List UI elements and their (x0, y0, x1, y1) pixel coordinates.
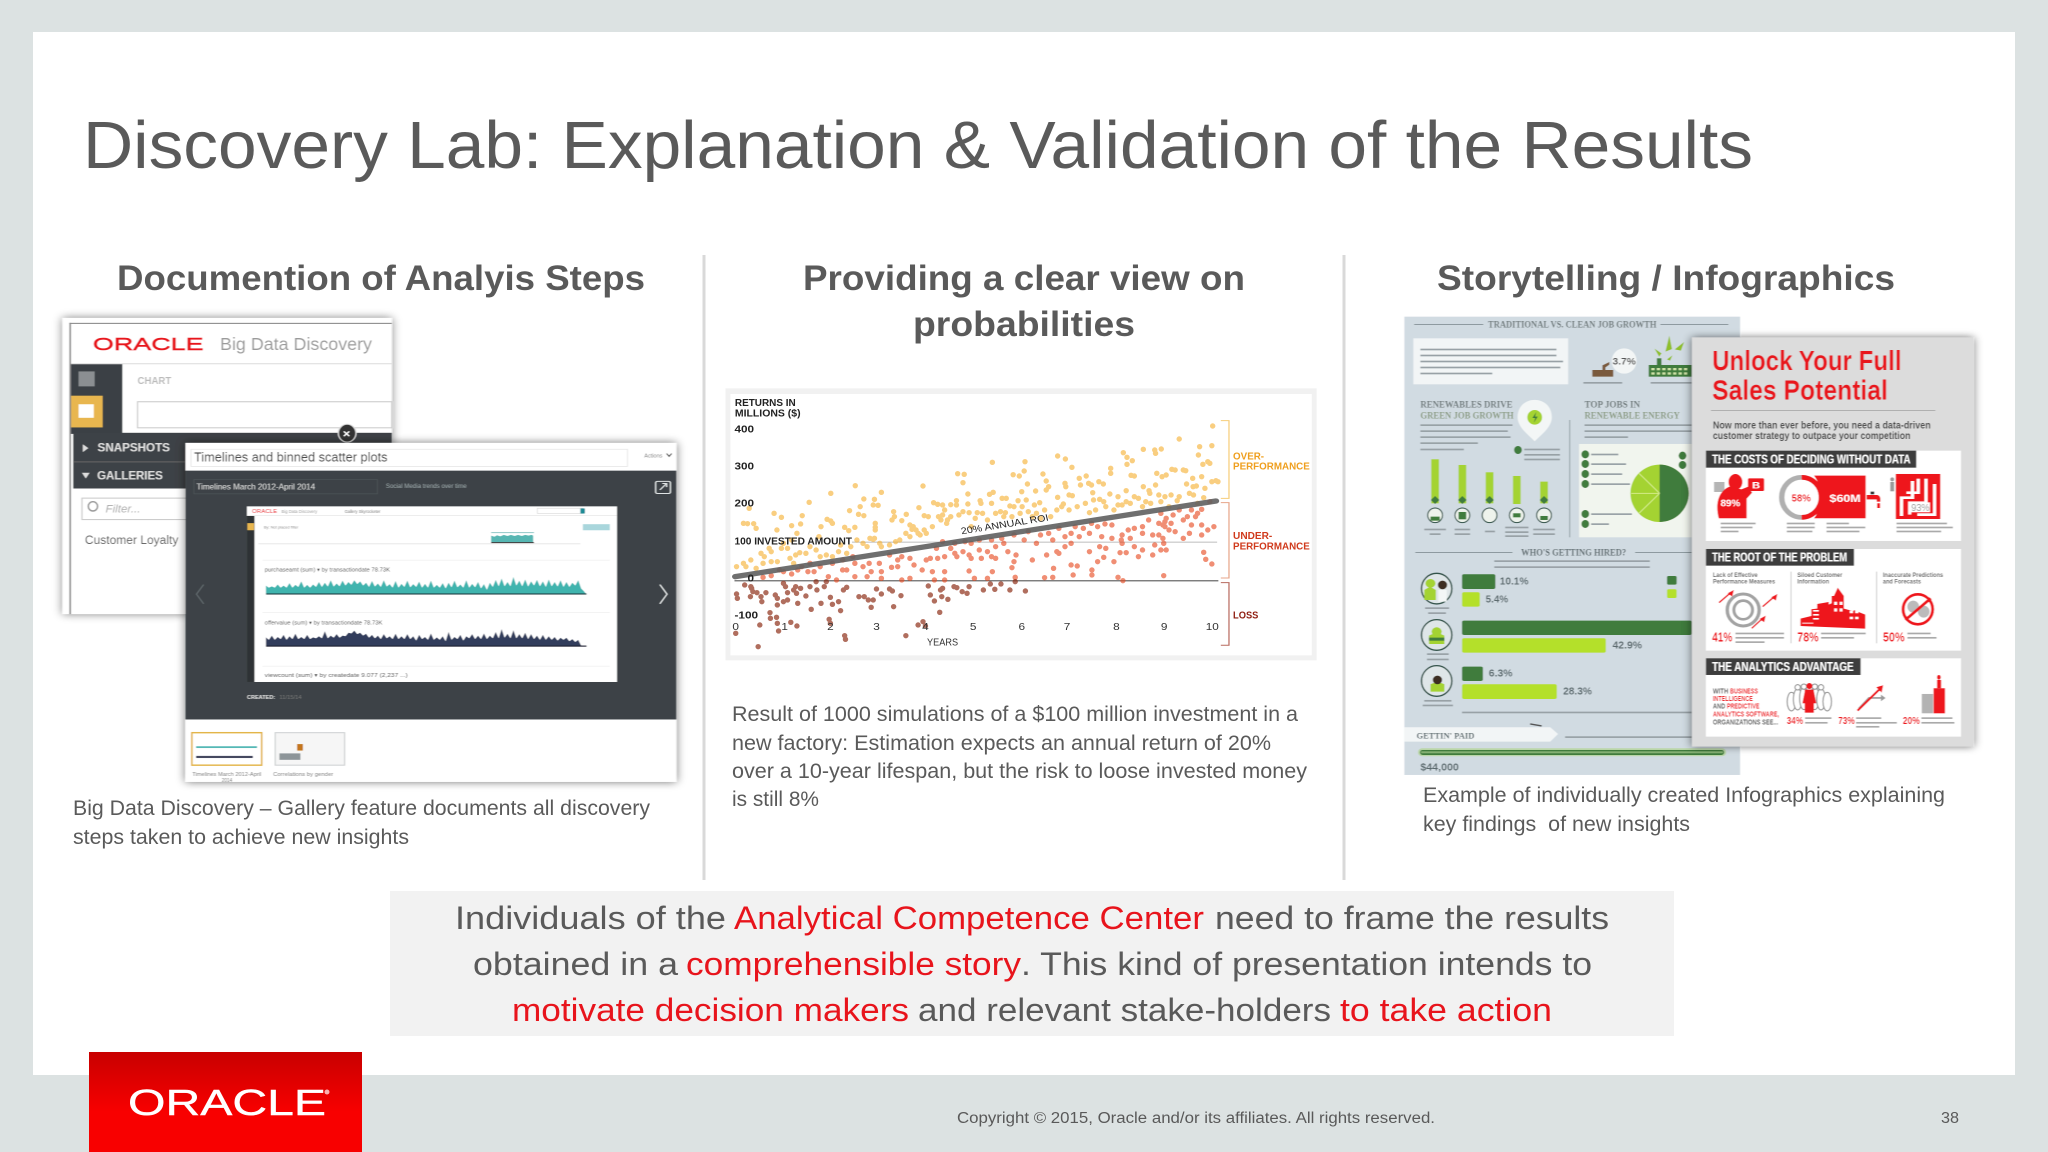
screenshot: front gallery window: 11/15/14 (279, 695, 302, 701)
section: analytics advantage (1706, 658, 1961, 737)
screenshot: back window: GALLERIES (97, 469, 163, 482)
heading: probabilities: probabilities (913, 304, 1135, 344)
screenshot: back window (63, 318, 392, 614)
y axis labels (734, 398, 852, 621)
dots: over-performance (737, 426, 1218, 568)
caption: infographics (1423, 783, 1945, 836)
section: analytics advantage: THE ANALYTICS ADVANTAGE (1712, 660, 1854, 674)
section: costs of deciding without data: B (1752, 481, 1760, 491)
section: analytics advantage: 73% (1838, 716, 1855, 727)
screenshot: back window: CHART (138, 376, 172, 387)
bracket: over-performance (1221, 421, 1310, 498)
footer: copyright: Copyright © 2015, Oracle and/or its affiliates. All rights reserved. (957, 1110, 1435, 1127)
dots: loss (736, 582, 1025, 647)
infographic: clean job growth: 42.9% (1613, 640, 1642, 651)
x axis labels: YEARS (927, 637, 958, 648)
screenshot: front gallery window: Timelines March 2012-April 2014 (196, 482, 315, 491)
dots: under-performance (763, 502, 1214, 581)
section: analytics advantage: ANALYTICS SOFTWARE, (1713, 710, 1779, 718)
bracket: under-performance: PERFORMANCE (1233, 541, 1310, 552)
infographic: unlock your full sales potential: Unlock Your Full (1712, 346, 1902, 376)
logo: Oracle (89, 1052, 362, 1152)
screenshot: front gallery window: Timelines and binned scatter plots (194, 450, 388, 464)
screenshot: inner timeline charts: purchaseamt (sum) ▾ by transactiondate 78.73K (265, 567, 391, 573)
callout: key message: Analytical Competence Center (734, 900, 1204, 936)
section: root of the problem: and Forecasts (1883, 577, 1921, 585)
infographic: clean job growth: 5.4% (1486, 594, 1509, 605)
logo: Oracle: ORACLE (128, 1082, 326, 1123)
bracket: under-performance (1221, 503, 1310, 578)
text: simulation explanation: Result of 1000 simulations of a $100 million investment in a (732, 702, 1298, 726)
section: analytics advantage: 34% (1787, 716, 1804, 727)
callout: key message (390, 891, 1674, 1036)
section: costs of deciding without data: 58% (1791, 493, 1811, 504)
screenshot: inner timeline charts (247, 506, 617, 682)
panel: scatter chart of simulations (726, 388, 1317, 660)
infographic: clean job growth: GREEN JOB GROWTH (1420, 411, 1514, 421)
section: root of the problem: THE ROOT OF THE PROBLEM (1712, 551, 1847, 564)
caption: gallery (73, 796, 650, 849)
callout: key message: motivate decision makers (512, 992, 909, 1028)
section: analytics advantage: BUSINESS (1730, 687, 1758, 695)
bracket: loss (1221, 583, 1258, 645)
y axis labels: 100 INVESTED AMOUNT (734, 537, 852, 547)
section: costs of deciding without data: $60M (1830, 494, 1861, 505)
infographic: clean job growth: TRADITIONAL VS. CLEAN JOB GROWTH (1488, 320, 1657, 330)
section: root of the problem: Performance Measures (1713, 577, 1775, 585)
heading: probabilities (803, 258, 1245, 344)
section: analytics advantage: AND (1713, 702, 1726, 710)
text: simulation explanation (732, 702, 1307, 811)
x axis labels: 1 (781, 622, 788, 633)
y axis labels: MILLIONS ($) (735, 409, 801, 419)
callout: key message: . This kind of presentation intends to (1021, 946, 1592, 982)
x axis labels: 6 (1018, 622, 1025, 633)
bracket: over-performance: PERFORMANCE (1233, 462, 1310, 472)
x axis labels: 0 (732, 622, 739, 633)
x axis labels (732, 622, 1219, 648)
heading: documentation: Documention of Analyis Steps (117, 258, 645, 298)
screenshot: front gallery window: Actions (644, 454, 662, 459)
text: simulation explanation: new factory: Estimation expects an annual return of 20% (732, 731, 1271, 755)
screenshot: inner timeline charts: By: Not placed filter (264, 525, 299, 529)
x axis labels: 10 (1206, 622, 1219, 633)
y axis labels: RETURNS IN (735, 398, 796, 409)
y axis labels: -100 (734, 610, 758, 621)
title: Discovery Lab: Explanation & Validation of the Results (83, 108, 1753, 183)
screenshot: back window: × (343, 428, 350, 440)
infographic: clean job growth (1404, 317, 1740, 775)
infographic: unlock your full sales potential: Now more than ever before, you need a data-driven (1713, 420, 1931, 431)
label: annual ROI: 20% ANNUAL ROI (960, 513, 1050, 537)
screenshot: inner timeline charts: offervalue (sum) ▾ by transactiondate 78.73K (265, 620, 383, 626)
x axis labels: 4 (922, 622, 929, 633)
callout: key message: to take action (1340, 992, 1552, 1028)
infographic: clean job growth: 28.3% (1563, 686, 1592, 697)
section: root of the problem (1706, 549, 1961, 651)
caption: infographics: key findings of new insights (1423, 812, 1690, 836)
caption: gallery: Big Data Discovery – Gallery feature documents all discovery (73, 796, 650, 820)
screenshot: back window: Customer Loyalty (85, 533, 179, 547)
screenshot: front gallery window: Social Media trends over time (386, 483, 467, 490)
y axis labels: 0 (748, 574, 754, 584)
section: root of the problem: Information (1797, 577, 1829, 585)
infographic: clean job growth: GETTIN' PAID (1416, 732, 1475, 741)
infographic: unlock your full sales potential: Sales Potential (1712, 375, 1888, 406)
section: root of the problem: Lack of Effective (1713, 571, 1758, 579)
text: simulation explanation: over a 10-year lifespan, but the risk to loose invested money (732, 759, 1307, 783)
infographic: clean job growth: TOP JOBS IN (1585, 400, 1641, 410)
screenshot: inner timeline charts: viewcount (sum) ▾ by createdate 9.077 (2,237 ...) (265, 672, 408, 679)
heading: storytelling: Storytelling / Infographics (1437, 258, 1895, 298)
screenshot: front gallery window: Timelines March 2012-April (192, 772, 261, 778)
x axis labels: 5 (970, 622, 976, 633)
infographic: unlock your full sales potential: customer strategy to outpace your competition (1713, 431, 1910, 442)
panel: Big Data Discovery screenshots (63, 318, 676, 784)
section: analytics advantage: 20% (1903, 716, 1920, 727)
screenshot: front gallery window: 2014 (222, 778, 233, 784)
section: analytics advantage: INTELLIGENCE (1713, 695, 1753, 703)
infographic: unlock your full sales potential (1692, 337, 1974, 747)
infographic: clean job growth: RENEWABLE ENERGY (1585, 411, 1680, 421)
panel: infographic examples (1404, 317, 1974, 775)
screenshot: inner timeline charts: Gallery Skyrocketer (345, 509, 381, 514)
infographic: clean job growth: 6.3% (1489, 668, 1513, 679)
callout: key message: obtained in a (473, 946, 678, 982)
infographic: clean job growth: WHO'S GETTING HIRED? (1521, 548, 1626, 558)
x axis labels: 3 (873, 622, 880, 633)
callout: key message: comprehensible story (686, 946, 1021, 982)
screenshot: back window: Filter... (106, 503, 140, 515)
x axis labels: 7 (1064, 622, 1070, 633)
screenshot: front gallery window: CREATED: (247, 695, 275, 701)
section: costs of deciding without data (1706, 451, 1961, 541)
x axis labels: 8 (1113, 622, 1120, 633)
screenshot: inner timeline charts: Big Data Discovery (281, 509, 318, 514)
caption: gallery: steps taken to achieve new insights (73, 825, 409, 849)
section: costs of deciding without data: THE COSTS OF DECIDING WITHOUT DATA (1712, 452, 1911, 466)
section: analytics advantage: PREDICTIVE (1727, 702, 1760, 710)
heading: probabilities: Providing a clear view on (803, 258, 1245, 298)
screenshot: front gallery window: Correlations by gender (273, 772, 333, 778)
infographic: clean job growth: $44,000 (1420, 762, 1459, 773)
screenshot: front gallery window (186, 443, 676, 784)
footer: page number: 38 (1941, 1110, 1959, 1127)
section: analytics advantage: ORGANIZATIONS SEE... (1713, 718, 1778, 726)
caption: infographics: Example of individually created Infographics explaining (1423, 783, 1945, 807)
infographic: clean job growth: 10.1% (1500, 576, 1529, 587)
x axis labels: 9 (1161, 622, 1167, 633)
bracket: over-performance: OVER- (1233, 451, 1264, 462)
section: costs of deciding without data: 93% (1911, 503, 1930, 514)
y axis labels: 200 (734, 498, 754, 509)
screenshot: inner timeline charts: ORACLE (252, 509, 278, 515)
screenshot: back window: SNAPSHOTS (98, 441, 170, 454)
ROI line (735, 501, 1216, 577)
section: costs of deciding without data: 89% (1721, 498, 1740, 509)
text: simulation explanation: is still 8% (732, 787, 819, 811)
callout: key message: Individuals of the (455, 900, 726, 936)
bracket: under-performance: UNDER- (1233, 531, 1272, 542)
section: root of the problem: 41% (1712, 631, 1732, 644)
section: root of the problem: 78% (1797, 631, 1819, 644)
x axis labels: 2 (827, 622, 834, 633)
infographic: clean job growth: RENEWABLES DRIVE (1420, 400, 1513, 410)
section: root of the problem: Inaccurate Predictions (1883, 571, 1943, 579)
y axis labels: 400 (734, 424, 754, 435)
section: root of the problem: Siloed Customer (1797, 571, 1843, 579)
bracket: loss: LOSS (1233, 611, 1258, 621)
callout: key message: need to frame the results (1215, 900, 1609, 936)
screenshot: back window: Big Data Discovery (220, 334, 373, 354)
screenshot: back window: ORACLE (93, 334, 204, 355)
callout: key message: and relevant stake-holders (918, 992, 1331, 1028)
y axis labels: 300 (734, 461, 754, 472)
infographic: clean job growth: 3.7% (1613, 357, 1636, 367)
section: analytics advantage: WITH (1713, 687, 1728, 695)
section: root of the problem: 50% (1883, 631, 1905, 644)
